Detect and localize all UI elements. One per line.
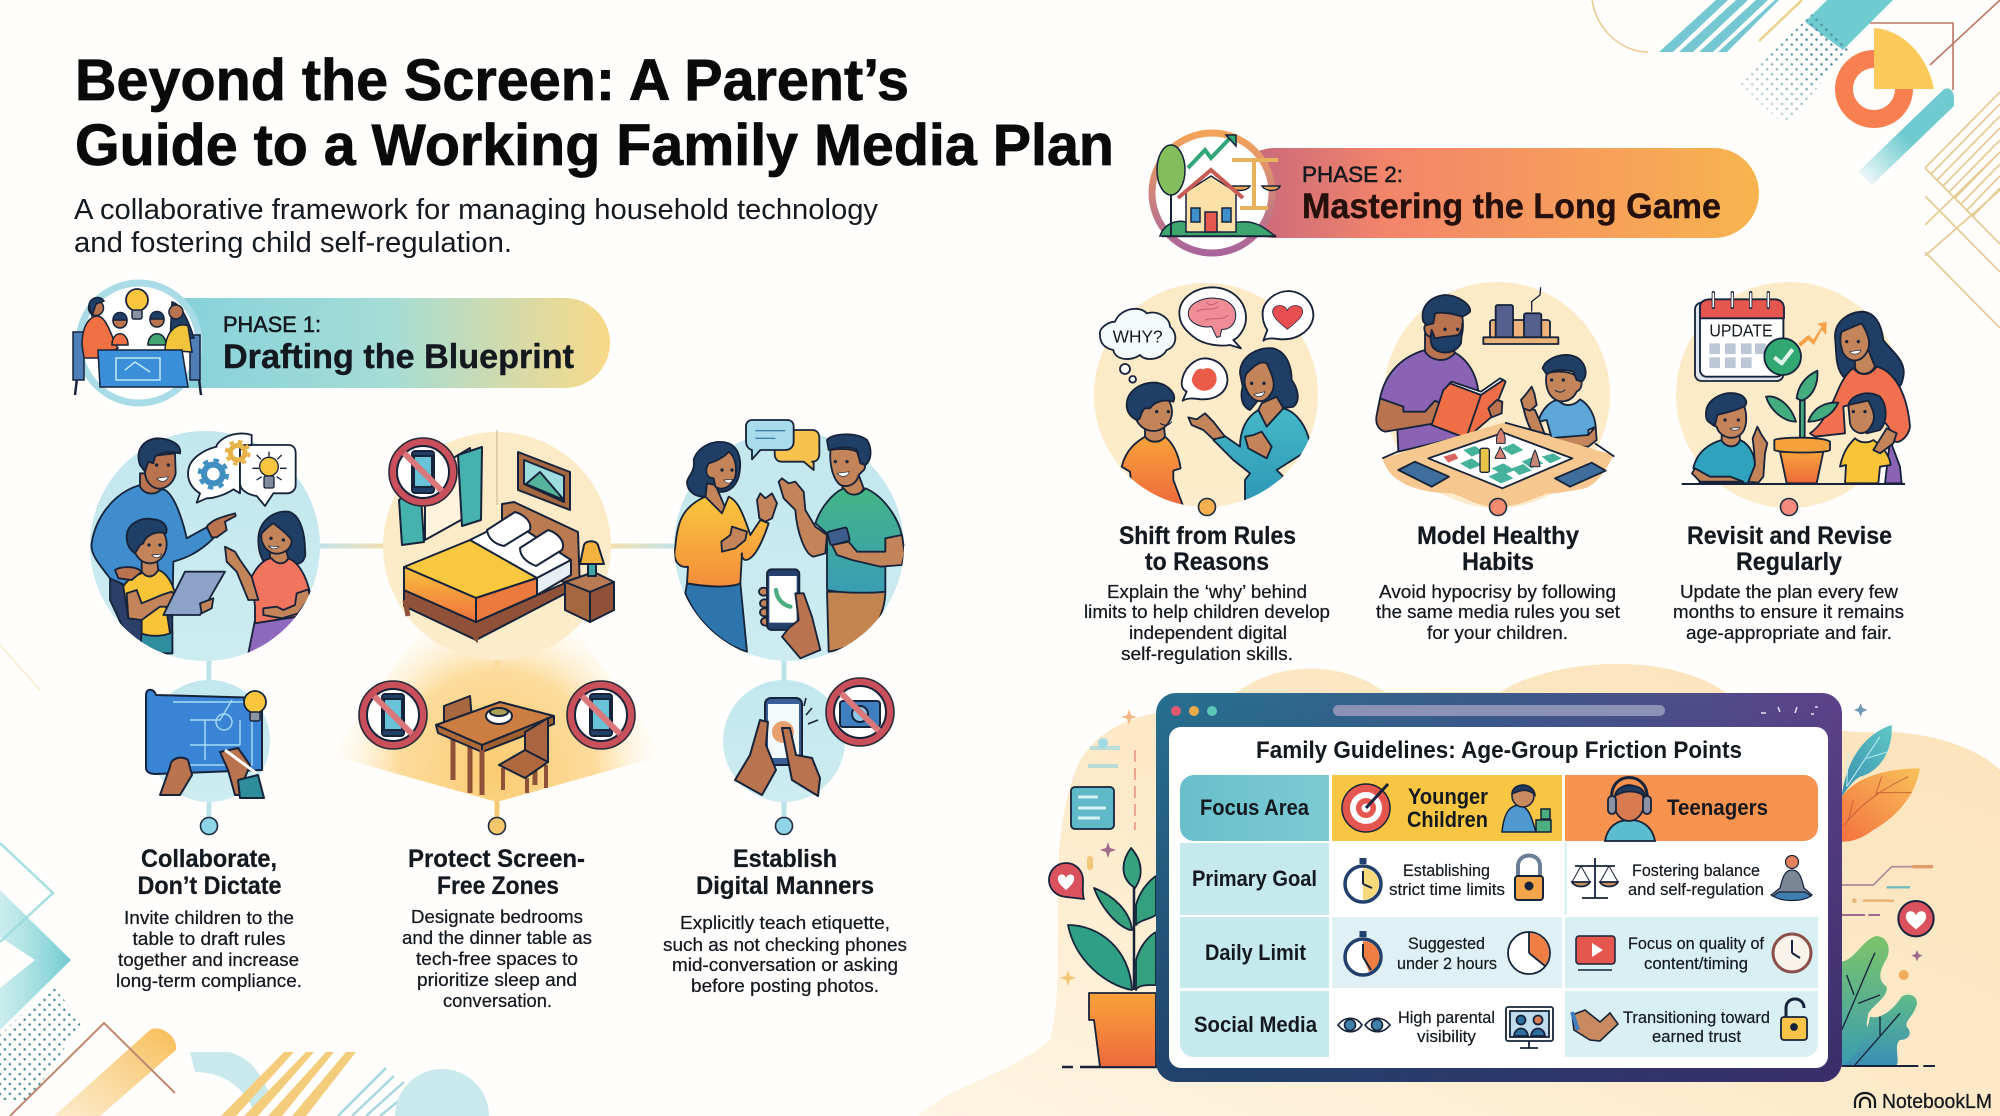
icon: eyes — [1338, 1018, 1390, 1032]
man — [779, 434, 905, 652]
illustration: family talking circle — [90, 431, 320, 661]
text block: protect screen-free zones: prioritize sleep and — [417, 970, 577, 990]
node dots phase 2 — [1198, 498, 1798, 516]
thought bubble: why — [1100, 309, 1175, 383]
phone in hand — [759, 569, 820, 658]
table: social media row: Social Media — [1194, 1012, 1318, 1037]
icon: house, tree, scales, growth arrow — [1157, 135, 1280, 236]
text block: collaborate, don't dictate: Collaborate, — [141, 845, 277, 873]
icon: family at blueprint table — [73, 289, 201, 395]
decoration: bottom left geometric shapes — [0, 645, 489, 1116]
woman — [1188, 348, 1310, 507]
panel: phase 2 banner — [1152, 133, 1759, 253]
speech bubble: heart — [1263, 291, 1313, 341]
bed — [404, 502, 580, 640]
window and curtains — [399, 447, 482, 545]
table: primary goal row: Fostering balance — [1632, 861, 1760, 880]
text block: shift from rules to reasons: to Reasons — [1145, 548, 1269, 576]
panel: phase 1 banner: Drafting the Blueprint — [223, 338, 574, 376]
panel: phase 1 banner: PHASE 1: — [223, 312, 321, 337]
boy with tablet — [115, 519, 225, 653]
table: header row: Focus Area — [1200, 795, 1310, 820]
text block: revisit and revise regularly: Revisit and Revise — [1687, 522, 1892, 550]
icon: open padlock — [1781, 999, 1807, 1040]
speech bubbles — [188, 433, 296, 506]
calendar update: UPDATE — [1709, 321, 1773, 341]
text block: revisit and revise regularly — [1673, 522, 1904, 643]
title: Guide to a Working Family Media Plan — [75, 113, 1114, 178]
table: daily limit row: content/timing — [1644, 954, 1748, 973]
table: daily limit row: Focus on quality of — [1628, 934, 1764, 953]
icon: monitor with people — [1506, 1007, 1553, 1048]
thought bubble: why: WHY? — [1113, 326, 1163, 346]
nightstand and lamp — [565, 541, 614, 622]
icon: meditating figure — [1771, 856, 1812, 900]
text block: establish digital manners: Digital Manners — [696, 872, 874, 900]
table: social media row — [1180, 991, 1818, 1057]
illustration: right foliage, circuit lines and heart — [1842, 703, 1935, 1066]
subtitle: and fostering child self-regulation. — [74, 227, 512, 259]
father — [91, 438, 236, 653]
text block: revisit and revise regularly: Update the plan every few — [1680, 582, 1899, 602]
text block: protect screen-free zones: and the dinner table as — [402, 928, 592, 948]
picture frame — [518, 452, 570, 510]
speech bubbles — [746, 420, 819, 470]
speech bubble: brain — [1179, 287, 1246, 348]
speech bubble: frustration — [1182, 358, 1227, 401]
glow: wedge to dinner table — [330, 630, 665, 802]
text block: revisit and revise regularly: age-appropriate and fair. — [1686, 623, 1892, 643]
table: social media row: High parental — [1398, 1008, 1495, 1027]
panel: browser window — [1156, 693, 1842, 1082]
table: primary goal row: Primary Goal — [1192, 866, 1317, 891]
text block: shift from rules to reasons: self-regulation skills. — [1121, 644, 1293, 664]
boy — [1692, 393, 1767, 483]
illustration: digital manners conversation circle — [674, 420, 905, 661]
decoration: top right geometric shapes — [1592, 0, 2000, 328]
panel: phase 2 banner: PHASE 2: — [1302, 162, 1403, 187]
text block: protect screen-free zones: conversation. — [443, 991, 552, 1011]
text block: shift from rules to reasons — [1084, 522, 1330, 664]
illustration: model healthy habits circle — [1376, 282, 1614, 508]
illustration: blueprint small circle — [146, 680, 270, 802]
calendar update — [1695, 293, 1801, 381]
icon: wall clock — [1773, 934, 1811, 972]
text block: shift from rules to reasons: limits to help children develop — [1084, 602, 1330, 622]
text block: establish digital manners — [663, 845, 907, 996]
text block: collaborate, don't dictate: table to draft rules — [132, 929, 286, 949]
girl — [225, 511, 310, 653]
table: daily limit row: Daily Limit — [1205, 940, 1307, 965]
icon: padlock — [1515, 856, 1543, 900]
table: primary goal row: strict time limits — [1389, 880, 1505, 899]
table: daily limit row — [1180, 917, 1818, 988]
text block: revisit and revise regularly: months to ensure it remains — [1673, 602, 1904, 622]
subtitle — [74, 194, 878, 259]
boy — [1122, 383, 1183, 507]
icon: clock with shaded segment — [1508, 932, 1550, 974]
table: social media row: Transitioning toward — [1623, 1008, 1770, 1027]
panel: phase 1 banner — [73, 283, 610, 403]
shelf with charging devices — [1483, 287, 1558, 344]
table: header row: Teenagers — [1667, 795, 1768, 820]
text block: protect screen-free zones — [402, 845, 592, 1011]
logo: NotebookLM: NotebookLM — [1882, 1091, 1992, 1113]
text block: collaborate, don't dictate: Invite children to the — [124, 908, 294, 928]
text block: collaborate, don't dictate: Don’t Dictate — [138, 872, 282, 900]
table: social media row: earned trust — [1652, 1027, 1741, 1046]
girl — [1840, 393, 1897, 483]
text block: model healthy habits: for your children. — [1427, 623, 1568, 643]
text block: establish digital manners: mid-conversation or asking — [672, 955, 898, 975]
plant pot — [1766, 371, 1838, 483]
title: Beyond the Screen: A Parent’s — [75, 48, 909, 113]
icon: stopwatch two hours — [1345, 931, 1381, 975]
icon: video play — [1576, 936, 1615, 970]
illustration: revisit and revise circle — [1676, 282, 1910, 508]
text block: establish digital manners: such as not checking phones — [663, 935, 907, 955]
table: header row: Younger — [1408, 784, 1488, 809]
text block: shift from rules to reasons: Shift from Rules — [1119, 522, 1296, 550]
text block: protect screen-free zones: Designate bedrooms — [411, 907, 583, 927]
illustration: dinner table — [359, 681, 635, 795]
icon: handshake — [1572, 1010, 1618, 1041]
table: primary goal row: and self-regulation — [1628, 880, 1764, 899]
text block: model healthy habits: Habits — [1462, 548, 1534, 576]
table title: Family Guidelines: Age-Group Friction Points — [1256, 737, 1742, 764]
icon: child with blocks — [1502, 785, 1551, 832]
title — [75, 48, 1114, 178]
illustration: left plant and chips — [1049, 709, 1160, 1067]
text block: establish digital manners: before posting photos. — [691, 976, 879, 996]
icon: teen with headphones — [1605, 778, 1655, 841]
subtitle: A collaborative framework for managing household technology — [74, 194, 878, 226]
illustration: phone and no camera small circle — [723, 678, 894, 802]
icon: target — [1342, 784, 1390, 832]
illustration: tech-free bedroom circle — [330, 430, 665, 802]
mother — [1810, 312, 1910, 483]
text block: protect screen-free zones: Protect Screen- — [408, 845, 585, 873]
growth arrow — [1798, 322, 1827, 347]
text block: collaborate, don't dictate: together and increase — [118, 950, 299, 970]
text block: shift from rules to reasons: Explain the ‘why’ behind — [1107, 582, 1307, 602]
table and game board — [1382, 423, 1614, 507]
text block: establish digital manners: Establish — [733, 845, 837, 873]
text block: collaborate, don't dictate: long-term compliance. — [116, 971, 302, 991]
illustration: rules to reasons circle — [1094, 283, 1318, 507]
text block: collaborate, don't dictate — [116, 845, 302, 991]
text block: model healthy habits: Model Healthy — [1417, 522, 1579, 550]
table: primary goal row — [1180, 843, 1812, 915]
text block: model healthy habits: the same media rules you set — [1376, 602, 1620, 622]
panel: phase 2 banner: Mastering the Long Game — [1302, 187, 1721, 226]
text block: protect screen-free zones: Free Zones — [437, 872, 559, 900]
table: daily limit row: under 2 hours — [1397, 954, 1497, 973]
table: header row: Children — [1407, 807, 1488, 832]
father reading — [1376, 295, 1478, 452]
table: daily limit row: Suggested — [1408, 934, 1485, 953]
connector lines phase 1 — [209, 544, 784, 820]
text block: model healthy habits: Avoid hypocrisy by following — [1379, 582, 1616, 602]
node dots phase 1 — [200, 818, 792, 834]
icon: stopwatch — [1345, 858, 1381, 902]
woman — [674, 442, 777, 652]
text block: establish digital manners: Explicitly teach etiquette, — [680, 913, 890, 933]
text block: revisit and revise regularly: Regularly — [1736, 548, 1842, 576]
text block: protect screen-free zones: tech-free spaces to — [416, 949, 578, 969]
boy — [1521, 355, 1597, 447]
table: social media row: visibility — [1417, 1027, 1477, 1046]
background blob: cream wash — [918, 664, 2000, 1116]
table: header row — [1180, 775, 1818, 841]
text block: shift from rules to reasons: independent digital — [1129, 623, 1287, 643]
icon: balance scales — [1572, 858, 1618, 898]
book — [1432, 378, 1506, 438]
table: primary goal row: Establishing — [1403, 861, 1490, 880]
text block: model healthy habits — [1376, 522, 1620, 643]
